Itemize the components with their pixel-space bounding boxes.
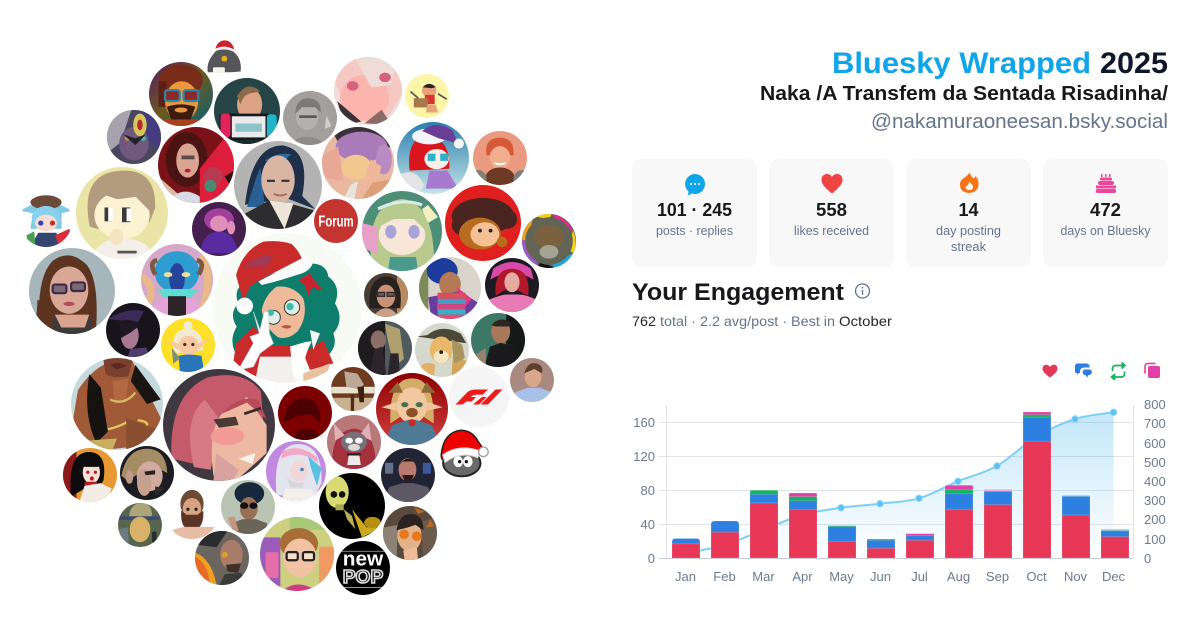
avatar: penguin with santa hat [441,430,488,476]
right axis labels [1144,397,1166,566]
month labels: May [829,569,854,584]
month labels [675,569,1126,584]
avatar: pastel-haired character [266,441,326,501]
x axis baseline [659,558,1133,560]
avatar: woman in turban [221,480,275,534]
icon: speech bubble [685,174,705,195]
engagement summary: October [839,313,892,329]
avatar: purple-haired girls embracing [322,127,394,199]
month labels: Mar [752,569,775,584]
bar: May [828,526,856,558]
right axis labels: 800 [1144,397,1166,412]
avatar: dark goth figure [358,321,412,375]
bar: Dec [1101,529,1129,558]
stat value: 14 [958,200,978,220]
handle: @nakamuraoneesan.bsky.social [871,111,1168,133]
left axis labels: 0 [648,551,655,566]
bar: Feb [711,521,739,558]
month labels: Jul [911,569,928,584]
panel: likes received [769,159,894,267]
avatar: person with orange glasses [383,506,437,560]
right axis labels: 400 [1144,474,1166,489]
avatar: red-haired woman in pink [485,258,539,312]
month labels: Sep [986,569,1009,584]
avatar: dark red silhouette [278,386,332,440]
icon: reposts [1112,362,1125,380]
stat label: days on Bluesky [1060,223,1151,238]
month labels: Jun [870,569,891,584]
chart legend [1042,362,1160,380]
avatar: bearded man sketch [172,490,214,539]
avatar: woman with glasses, brown hair [29,248,115,338]
month labels: Aug [947,569,970,584]
right axis labels: 500 [1144,455,1166,470]
avatar: pink-haired face close-up [163,369,275,481]
engagement summary [632,313,892,329]
left axis labels: 160 [633,415,655,430]
avatar: woman with blue-streaked hair [234,141,322,229]
left axis labels [633,415,655,566]
avatar: anime girl, brown hair on pale yellow [76,167,168,259]
avatar: red-haired witch chibi [397,122,469,194]
month labels: Jan [675,569,696,584]
avatar: gorilla with santa hat [208,40,241,73]
avatar: person in hat [118,503,162,547]
bar: Apr [789,493,817,558]
bar: Aug [945,485,973,558]
avatar cloud [20,40,576,595]
month labels: Feb [713,569,736,584]
avatar: Forum logo [314,199,358,243]
avatar: woman with jewellery [71,358,163,450]
avatar: blue tiger [141,244,213,318]
right axis labels: 600 [1144,436,1166,451]
avatar: curly-haired woman with glasses [364,273,408,317]
avatar: red fox character [327,415,381,469]
avatar: man with glasses and books [260,517,334,591]
bar: Jun [867,539,895,558]
engagement summary: total · 2.2 avg/post · Best in [660,313,835,329]
icon: heart [822,174,842,194]
avatar: blonde covering mouth [120,446,174,500]
stat value: 101 · 245 [657,200,732,220]
title: 2025 [1100,47,1168,80]
icon: quotes [1145,364,1160,378]
icon: cake [1096,174,1116,193]
gridlines and axes [659,405,1134,558]
header [760,47,1168,133]
left axis labels: 80 [641,483,655,498]
avatar: pink haired anime girl [334,57,402,125]
right axis labels: 700 [1144,416,1166,431]
avatar: woman with red fan [158,127,238,203]
bar: Mar [750,490,778,558]
chart: monthly engagement [633,397,1166,584]
avatar: comic character on yellow [405,74,449,118]
avatar: F1 logo [449,367,509,427]
stat label: likes received [794,223,869,238]
stat value: 558 [816,200,847,220]
bar: Nov [1062,495,1090,558]
icon: replies [1075,364,1092,378]
month labels: Dec [1102,569,1126,584]
engagement summary: 762 [632,313,656,329]
stat label: streak [951,239,986,254]
panel: posts and replies [632,159,757,267]
avatar: lace on wood [331,367,375,411]
avatar: orange devil [473,131,527,185]
stat value: 472 [1090,200,1121,220]
avatar: elf on yellow [161,318,215,372]
display name: Naka /A Transfem da Sentada Risadinha/ [760,83,1168,105]
panel: days on Bluesky [1043,159,1168,267]
month labels: Nov [1064,569,1088,584]
avatar: sketch of a man [283,91,337,145]
avatar: newpop logo [336,541,390,595]
right axis labels: 300 [1144,493,1166,508]
stat label: posts · replies [656,223,733,238]
heading: your engagement: Your Engagement [632,279,844,306]
bar: Oct [1023,412,1051,558]
bar: Sep [984,489,1012,558]
right axis labels: 100 [1144,532,1166,547]
bar: Jul [906,534,934,558]
avatar: bearded man with sunglasses [149,62,213,129]
avatar: purple character [192,202,246,256]
avatar: black hair, dark background [106,303,160,357]
avatar: skeleton with trumpet [319,473,385,539]
title: Bluesky Wrapped [832,47,1091,80]
cumulative area and line [685,409,1117,558]
avatar: blue-haired chibi with beret [20,195,72,247]
right axis labels: 200 [1144,512,1166,527]
avatar: main profile illustration, teal hair and santa hat [212,233,362,390]
stacked bars [672,412,1129,558]
avatar: man holding game console [214,78,280,147]
icon: likes [1042,365,1058,378]
avatar: doge with hat [415,323,469,377]
stat label: day posting [936,223,1001,238]
panel: posting streak [906,159,1031,267]
avatar: purple demon [107,110,161,164]
left axis labels: 40 [641,517,655,532]
right axis labels: 0 [1144,551,1151,566]
month labels: Oct [1026,569,1047,584]
avatar: man in black shirt [471,313,525,367]
avatar: man with beard, dim room [381,448,435,502]
stat label [936,223,1001,254]
icon: flame [960,173,979,193]
avatar: man in blue shirt, brick wall [510,358,554,402]
left axis labels: 120 [633,449,655,464]
month labels: Apr [792,569,813,584]
icon: info [856,284,870,298]
avatar: bald man with orange shades [195,531,249,585]
avatar: blonde elf with dog nose [376,373,448,445]
bar: Jan [672,538,700,558]
avatar: blue-haired person with books [419,257,481,321]
avatar: curly haired character on red [445,185,521,261]
avatar: blurry cat with colour ring [522,212,576,268]
avatar: goth anime girl [63,448,117,502]
avatar: green-haired anime girl [362,191,442,271]
